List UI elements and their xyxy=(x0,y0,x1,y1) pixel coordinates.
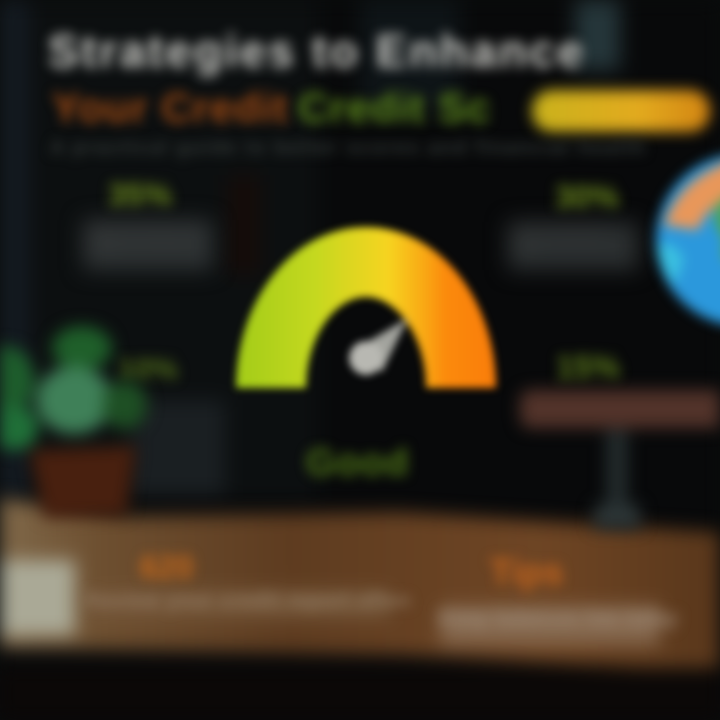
table label: right orange: Tips xyxy=(490,551,563,592)
left top description: Payment history on time xyxy=(83,220,203,252)
stat: left top xyxy=(75,176,220,278)
icon: potted plant xyxy=(0,317,154,526)
stat: left lower value: 10% xyxy=(118,353,178,386)
table label: left orange: 620 xyxy=(140,549,193,585)
stat: right top xyxy=(500,178,646,278)
gauge arc xyxy=(271,262,461,388)
subtitle highlight bar xyxy=(532,90,710,132)
plant pot xyxy=(30,446,136,518)
right top value: 30% xyxy=(555,179,619,215)
left top value: 35% xyxy=(108,177,172,213)
plant leaves xyxy=(0,326,147,450)
right top description xyxy=(508,222,638,270)
subtitle orange words: Your Credit xyxy=(52,84,289,131)
table note: right: Keep balances low today xyxy=(440,608,678,630)
stat: right lower value: 15% xyxy=(556,349,620,385)
subtitle: highlighted credit score line xyxy=(48,78,720,144)
globe xyxy=(646,147,720,333)
gauge needle xyxy=(349,318,408,375)
left top description xyxy=(83,220,213,270)
side table xyxy=(511,380,720,536)
table note: left: Review your credit report often xyxy=(85,590,412,612)
title: Strategies to Enhance xyxy=(48,25,586,77)
table top xyxy=(520,390,720,428)
gauge value: Good xyxy=(306,442,409,484)
subtitle green words: Credit Sc xyxy=(298,84,491,131)
right top description: Credit utilization ratio xyxy=(508,222,608,254)
table stem xyxy=(606,430,628,510)
tagline: A practical guide to better scores and financial health xyxy=(50,137,646,159)
